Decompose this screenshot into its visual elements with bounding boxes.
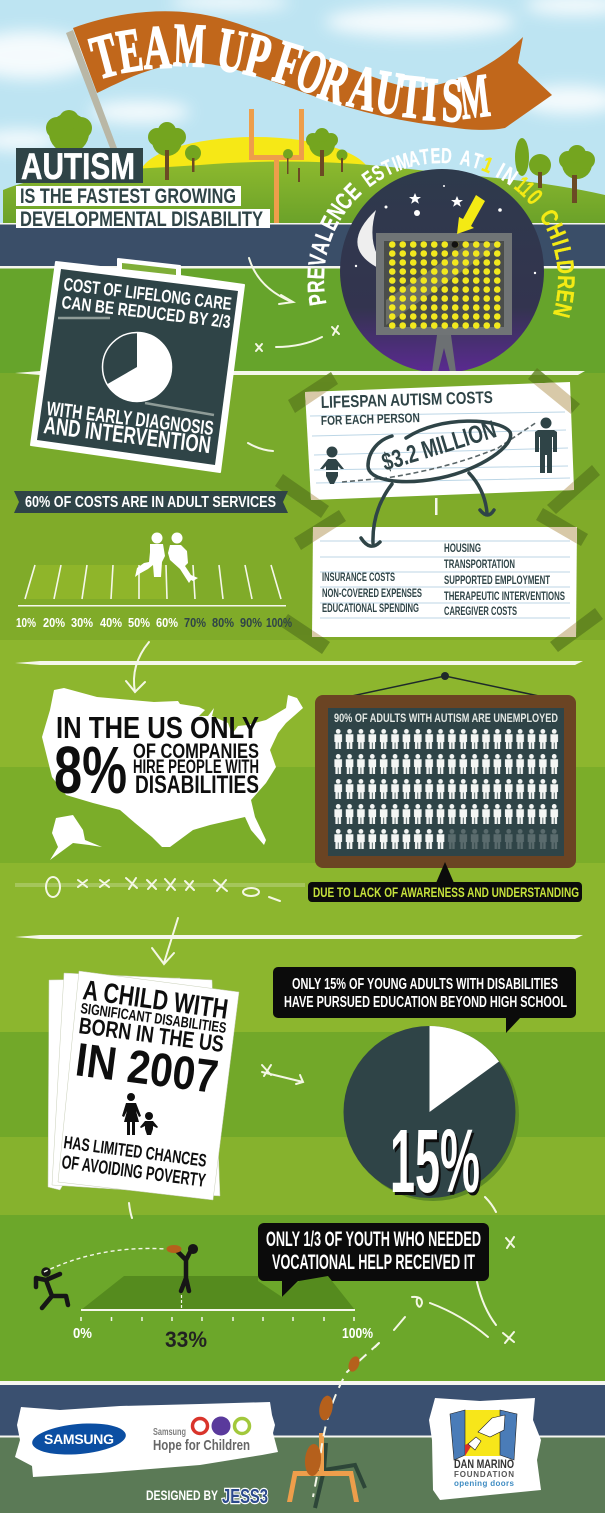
chalk tick — [435, 498, 438, 515]
panel: chalkboard — [315, 672, 576, 868]
designed by: DESIGNED BY — [146, 1487, 218, 1503]
sun over the hill — [140, 137, 370, 213]
arc heading: prevalence estimated at 1 in 110 children: C — [534, 204, 565, 231]
tape on paper corners — [312, 527, 577, 637]
arc heading: prevalence estimated at 1 in 110 children: H — [541, 219, 572, 243]
text: reduced: CAN BE REDUCED BY 2/3 — [61, 292, 232, 332]
arrow: chalk down to map — [126, 642, 149, 692]
throw path — [44, 1248, 166, 1272]
arc heading: prevalence estimated at 1 in 110 children: M — [393, 148, 413, 175]
text: cost: COST OF LIFELONG CARE — [63, 274, 233, 314]
text: for each person: FOR EACH PERSON — [321, 410, 420, 428]
arc heading: prevalence estimated at 1 in 110 children: T — [378, 154, 397, 180]
designed by: JESS3 — [222, 1486, 268, 1508]
arc heading: prevalence estimated at 1 in 110 children — [303, 143, 580, 320]
logo: doors — [450, 1410, 517, 1460]
field stripes — [0, 267, 605, 1385]
text: card copy: SIGNIFICANT DISABILITIES — [79, 1000, 227, 1037]
percent labels: 60% — [156, 615, 178, 630]
heading: autism is fastest growing: DEVELOPMENTAL DISABILITY — [20, 208, 263, 231]
logo: hope for children — [153, 1416, 250, 1454]
hills — [3, 162, 605, 225]
ribbon: 60% of costs: 60% OF COSTS ARE IN ADULT SERVICES — [25, 494, 276, 511]
panel: cost lists paper — [312, 527, 577, 637]
tape on paper corners — [305, 382, 574, 500]
banner title: M — [172, 10, 207, 80]
divider 2 — [15, 661, 583, 665]
pie chart 2/3 — [102, 332, 172, 402]
clipboard tab — [122, 263, 176, 275]
chalk x marks — [256, 326, 339, 351]
icon: yellow arrow — [457, 195, 485, 234]
text: card copy: BORN IN THE US — [77, 1012, 225, 1057]
list: right column — [444, 543, 565, 618]
logo text — [454, 1457, 515, 1488]
arc heading: prevalence estimated at 1 in 110 children: D — [551, 259, 580, 275]
arc heading: prevalence estimated at 1 in 110 children: A — [458, 145, 474, 171]
icon: quarterback throwing — [36, 1270, 68, 1308]
panel: dan marino brush — [429, 1398, 541, 1500]
stars — [355, 185, 536, 274]
banner — [73, 11, 552, 130]
night circle with scoreboard — [340, 169, 544, 373]
arc heading: prevalence estimated at 1 in 110 children: 0 — [521, 185, 547, 210]
arc heading: prevalence estimated at 1 in 110 children: E — [430, 143, 441, 168]
pie chart 15%: 15% — [392, 1115, 482, 1215]
arc heading: prevalence estimated at 1 in 110 children: R — [552, 275, 580, 290]
chart: yard lines — [16, 532, 292, 630]
logo: hope for children: Samsung — [153, 1427, 186, 1438]
text: in the US only 8%: OF COMPANIES — [133, 740, 259, 763]
arc heading: prevalence estimated at 1 in 110 children: I — [492, 159, 508, 183]
list: right column: HOUSING — [444, 543, 481, 555]
scoreboard stand — [432, 335, 456, 372]
goal post top — [249, 109, 304, 223]
percent labels — [16, 615, 292, 630]
list: left column: INSURANCE COSTS — [322, 572, 395, 584]
arc heading: prevalence estimated at 1 in 110 children: 1 — [509, 172, 533, 198]
chalk dash — [248, 443, 273, 451]
callout: only 1/3 — [258, 1223, 489, 1297]
icon: baby — [320, 446, 344, 484]
banner title: T — [84, 20, 126, 93]
logo text: opening doors — [454, 1479, 515, 1488]
pie chart 15%: 15% — [390, 1112, 480, 1212]
percent labels: 20% — [43, 615, 65, 630]
banner title: U — [371, 57, 407, 128]
banner title: S — [441, 67, 464, 136]
callout: only 1/3: VOCATIONAL HELP RECEIVED IT — [272, 1251, 475, 1274]
text: card copy: IN 2007 — [73, 1032, 221, 1103]
arc heading: prevalence estimated at 1 in 110 children: V — [304, 253, 332, 268]
arc heading: prevalence estimated at 1 in 110 children: L — [311, 226, 339, 245]
arrow: chalk to circle — [249, 258, 293, 304]
logo text: DAN MARINO — [454, 1457, 514, 1471]
arc heading: prevalence estimated at 1 in 110 children: E — [316, 212, 345, 235]
arc heading: prevalence estimated at 1 in 110 children: T — [418, 144, 431, 169]
callout: lack of awareness — [308, 862, 582, 902]
banner title: I — [421, 65, 440, 135]
arrows to cost lists — [361, 473, 494, 546]
panel: stacked cards — [48, 971, 239, 1200]
panel: clipboard — [31, 259, 244, 472]
banner title: A — [342, 52, 385, 125]
footer green band — [0, 1437, 605, 1513]
dashed cost line — [342, 422, 537, 482]
text: $3.2 million: $3.2 MILLION — [379, 415, 500, 477]
ruled lines — [320, 541, 570, 618]
arc heading: prevalence estimated at 1 in 110 children: E — [551, 288, 580, 305]
text: card copy — [60, 974, 230, 1192]
banner title: P — [238, 21, 277, 93]
goal post bottom — [287, 1433, 359, 1502]
divider 3 — [15, 935, 583, 939]
banner title: A — [141, 13, 173, 83]
heading: autism is fastest growing: IS THE FASTEST GROWING — [20, 185, 236, 208]
text: in the US only 8%: HIRE PEOPLE WITH — [133, 757, 259, 778]
percent labels: 50% — [128, 615, 150, 630]
text: in the US only 8%: IN THE US ONLY — [56, 710, 259, 745]
arc heading: prevalence estimated at 1 in 110 children: P — [304, 292, 332, 307]
alaska — [50, 815, 102, 860]
percent labels: 90% — [240, 615, 262, 630]
arrow: chalk to cards — [152, 918, 178, 964]
chalk mark — [129, 1065, 496, 1218]
logo: hope for children: Hope for Children — [153, 1437, 250, 1454]
footer lines — [0, 1381, 605, 1438]
text: card copy: A CHILD WITH — [81, 974, 230, 1025]
arc heading: prevalence estimated at 1 in 110 children: E — [303, 267, 330, 280]
text: card copy: OF AVOIDING POVERTY — [60, 1152, 207, 1192]
arc heading: prevalence estimated at 1 in 110 children: E — [340, 179, 366, 205]
banner title: R — [311, 45, 360, 118]
designed by — [146, 1486, 268, 1508]
chalk play diagram — [15, 877, 305, 901]
logo: samsung: SAMSUNG — [44, 1431, 114, 1447]
list: right column: TRANSPORTATION — [444, 559, 515, 571]
sky background — [0, 0, 605, 225]
text: heading: LIFESPAN AUTISM COSTS — [321, 388, 493, 412]
text: intervention: AND INTERVENTION — [42, 412, 212, 459]
callout: only 15% — [273, 967, 576, 1033]
pictogram people — [332, 729, 560, 849]
ribbon: 60% of costs — [14, 491, 288, 513]
labels: 0% — [73, 1325, 92, 1342]
arc heading: prevalence estimated at 1 in 110 children: I — [389, 152, 402, 176]
percent labels: 10% — [16, 615, 36, 630]
road band — [0, 224, 605, 267]
arc heading: prevalence estimated at 1 in 110 children: 1 — [478, 152, 496, 178]
percent labels: 70% — [184, 615, 206, 630]
tape behind papers — [275, 368, 603, 654]
list: left column: NON-COVERED EXPENSES — [322, 588, 422, 600]
arc heading: prevalence estimated at 1 in 110 children: C — [330, 189, 358, 215]
text: early diagnosis: WITH EARLY DIAGNOSIS — [45, 398, 215, 440]
scoreboard frame — [380, 237, 508, 331]
percent labels: 80% — [212, 615, 234, 630]
ticks — [81, 1317, 354, 1321]
arc heading: prevalence estimated at 1 in 110 children: D — [441, 143, 452, 168]
smudges — [58, 318, 214, 415]
banner title — [84, 10, 493, 136]
banner title: U — [212, 15, 251, 88]
banner title: O — [288, 34, 337, 108]
text: in the US only 8%: DISABILITIES — [135, 771, 259, 799]
list: right column: CAREGIVER COSTS — [444, 606, 517, 618]
arc heading: prevalence estimated at 1 in 110 children: N — [497, 163, 521, 191]
ruled lines — [310, 412, 570, 483]
arc heading: prevalence estimated at 1 in 110 children: S — [367, 160, 388, 186]
heading: autism is fastest growing — [16, 146, 270, 231]
oval callout — [368, 421, 511, 482]
arc heading: prevalence estimated at 1 in 110 children: 1 — [514, 177, 539, 202]
arc heading: prevalence estimated at 1 in 110 children: A — [406, 145, 422, 172]
banner title: F — [267, 28, 309, 100]
text: in the US only 8% — [54, 710, 259, 808]
text: in the US only 8%: 8% — [54, 733, 127, 808]
icon: moon — [357, 210, 392, 274]
flag pole — [66, 30, 117, 148]
pie chart 15% — [344, 1026, 519, 1215]
arc heading: prevalence estimated at 1 in 110 children: N — [322, 200, 351, 225]
percent labels: 40% — [100, 615, 122, 630]
banner title: M — [456, 60, 493, 133]
chart: progress field 33%: 100% — [342, 1325, 373, 1342]
list: left column — [322, 572, 422, 615]
footer navy band — [0, 1385, 605, 1437]
chalk play lower right — [375, 1237, 514, 1347]
trees — [46, 110, 595, 203]
clouds — [0, 0, 605, 150]
scoreboard dots: 1 in 110 — [387, 240, 502, 330]
banner title: T — [396, 61, 427, 132]
percent labels: 30% — [71, 615, 93, 630]
chart: progress field 33%: 33% — [165, 1327, 207, 1352]
icon: man — [535, 418, 557, 473]
logo: samsung — [31, 1420, 127, 1458]
banner title: E — [113, 15, 147, 86]
panel: samsung brush — [15, 1402, 278, 1477]
chart: progress field 33% — [73, 1276, 373, 1352]
map of the US — [42, 688, 303, 860]
icon: receiver catching — [176, 1246, 196, 1291]
heading: autism is fastest growing: AUTISM — [21, 146, 135, 187]
icon: football players — [135, 532, 198, 583]
road edge lines — [0, 223, 605, 268]
kick flight path with footballs — [304, 1343, 379, 1497]
text: card copy: HAS LIMITED CHANCES — [62, 1132, 208, 1171]
arc heading: prevalence estimated at 1 in 110 children: L — [549, 244, 578, 262]
goal post shadow — [315, 1443, 365, 1508]
arc heading: prevalence estimated at 1 in 110 children: N — [547, 300, 578, 320]
icon: mother and baby — [122, 1093, 158, 1135]
highlighted dot — [452, 241, 458, 248]
list: left column: EDUCATIONAL SPENDING — [322, 603, 419, 615]
arc heading: prevalence estimated at 1 in 110 children: R — [303, 280, 330, 293]
logo text: FOUNDATION — [454, 1470, 514, 1479]
arc heading: prevalence estimated at 1 in 110 children: A — [306, 238, 335, 257]
icon: caught football — [166, 1245, 182, 1253]
hanging wire — [322, 672, 569, 704]
arc heading: prevalence estimated at 1 in 110 children: E — [358, 166, 380, 191]
percent labels: 100% — [266, 615, 292, 630]
list: right column: SUPPORTED EMPLOYMENT — [444, 575, 550, 587]
arc heading: prevalence estimated at 1 in 110 children: I — [547, 236, 574, 249]
panel: lifespan costs paper — [305, 382, 574, 500]
divider 1 — [15, 371, 585, 375]
arc heading: prevalence estimated at 1 in 110 children: T — [469, 148, 486, 174]
